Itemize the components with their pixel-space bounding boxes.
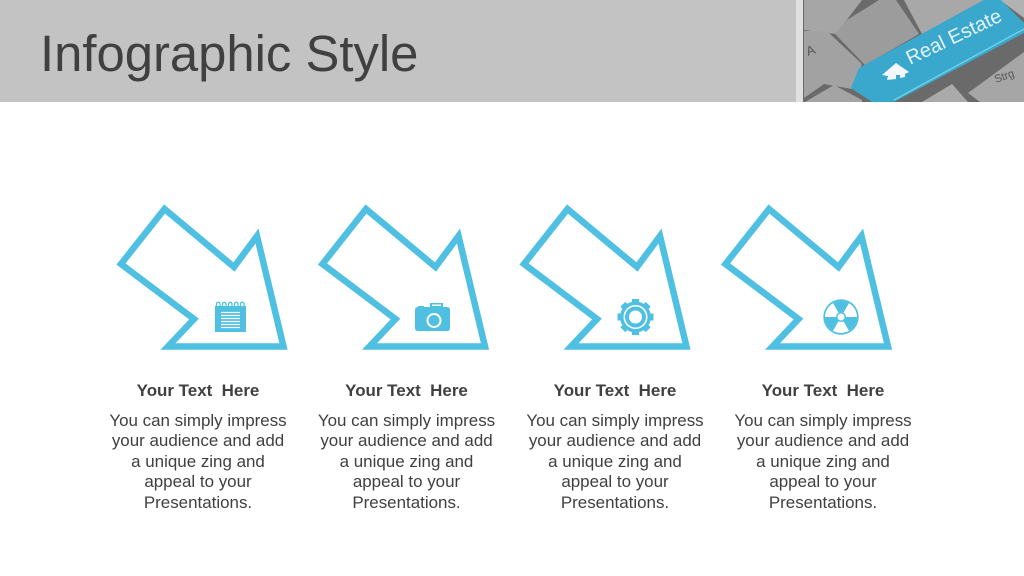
photo: real estate keyboard key: Real Estate <box>903 5 1005 70</box>
text block 4: You can simply impress <box>734 410 912 430</box>
text block 4: Presentations. <box>769 492 877 512</box>
text block 4: your audience and add <box>737 431 909 450</box>
arrow 1 <box>121 209 284 346</box>
icon: gear <box>618 299 654 335</box>
title: Infographic Style <box>40 25 418 82</box>
text block 4 <box>734 381 912 512</box>
text block 2: Presentations. <box>352 492 461 512</box>
arrow 3 <box>524 209 686 346</box>
photo: real estate keyboard key: A <box>804 42 817 59</box>
text block 1: Your Text Here <box>137 381 259 400</box>
text block 3: Presentations. <box>561 492 669 512</box>
text block 3: a unique zing and <box>548 452 682 470</box>
text block 3 <box>526 381 704 512</box>
text block 1: a unique zing and <box>131 452 265 470</box>
text block 1 <box>109 381 287 512</box>
text block 4: appeal to your <box>769 472 877 491</box>
text block 3: Your Text Here <box>554 381 676 400</box>
photo: real estate keyboard key <box>796 0 1024 102</box>
text block 1: You can simply impress <box>109 410 287 430</box>
photo: real estate keyboard key: Strg <box>993 68 1016 86</box>
header band <box>0 0 796 102</box>
text block 2: Your Text Here <box>345 381 468 400</box>
icon: notepad <box>215 302 246 332</box>
text block 1: appeal to your <box>144 472 252 491</box>
text block 2: a unique zing and <box>340 452 473 470</box>
text block 2: your audience and add <box>320 431 493 450</box>
text block 3: your audience and add <box>529 431 701 450</box>
arrow 4 <box>726 209 888 346</box>
text block 4: Your Text Here <box>762 381 884 400</box>
icon: camera <box>415 303 450 331</box>
text block 4: a unique zing and <box>756 452 890 470</box>
icon: radiation symbol <box>823 299 859 335</box>
text block 1: Presentations. <box>144 492 252 512</box>
text block 3: appeal to your <box>561 472 669 491</box>
text block 3: You can simply impress <box>526 410 704 430</box>
text block 2 <box>318 381 495 512</box>
text block 1: your audience and add <box>112 431 284 450</box>
text block 2: appeal to your <box>353 472 460 491</box>
arrow 2 <box>322 209 485 346</box>
text block 2: You can simply impress <box>318 410 495 430</box>
